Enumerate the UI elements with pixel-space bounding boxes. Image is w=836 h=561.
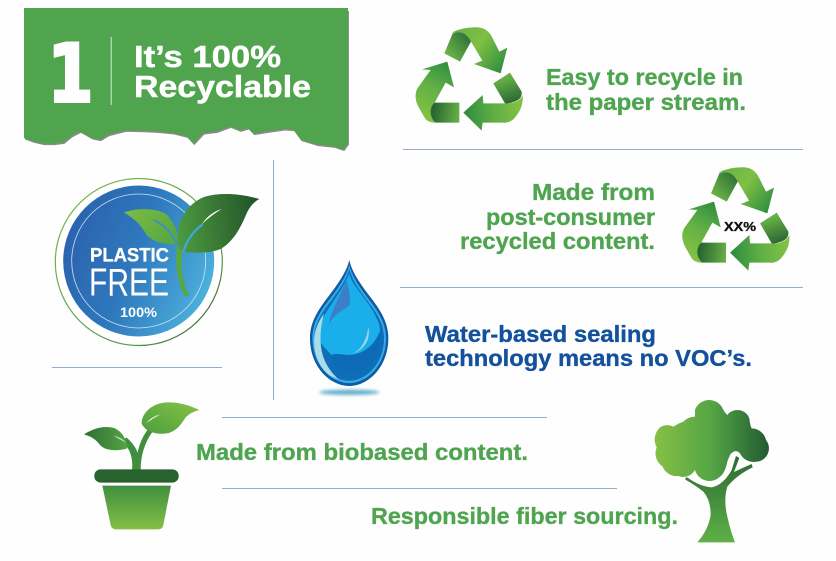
badge: plastic free 100% (55, 178, 259, 346)
text: post-consumer recycled content: recycled content. (460, 228, 655, 254)
text: water-based sealing: Water-based sealing (425, 321, 656, 347)
icon: recycling symbol (416, 27, 523, 131)
badge text: FREE (89, 262, 169, 304)
icon: recycling symbol with XX%: XX% (724, 219, 756, 234)
text: water-based sealing: technology means no VOC’s. (425, 345, 752, 371)
text: post-consumer recycled content: Made from (532, 179, 655, 205)
divider lines (52, 149, 803, 489)
text: post-consumer recycled content (460, 179, 655, 254)
text: easy to recycle: Easy to recycle in (546, 64, 743, 90)
text: biobased content: Made from biobased content. (196, 439, 528, 465)
badge text: 100% (120, 304, 158, 320)
banner heading (134, 39, 311, 104)
banner: It's 100% Recyclable (24, 8, 349, 151)
icon: tree (655, 400, 769, 542)
icon: recycling symbol with XX% (682, 167, 790, 271)
badge text: PLASTIC (90, 244, 169, 266)
icon: potted plant (84, 402, 199, 529)
text: water-based sealing (425, 321, 752, 371)
numeral 1: 1 (48, 28, 94, 120)
text: easy to recycle: the paper stream. (546, 89, 746, 115)
text: responsible fiber sourcing: Responsible fiber sourcing. (371, 503, 678, 529)
text: post-consumer recycled content: post-consumer (486, 204, 655, 230)
icon: water drop (310, 260, 388, 395)
text: easy to recycle (546, 64, 746, 115)
banner heading: Recyclable (134, 69, 311, 104)
banner heading: It’s 100% (134, 39, 281, 74)
badge text (89, 244, 169, 320)
